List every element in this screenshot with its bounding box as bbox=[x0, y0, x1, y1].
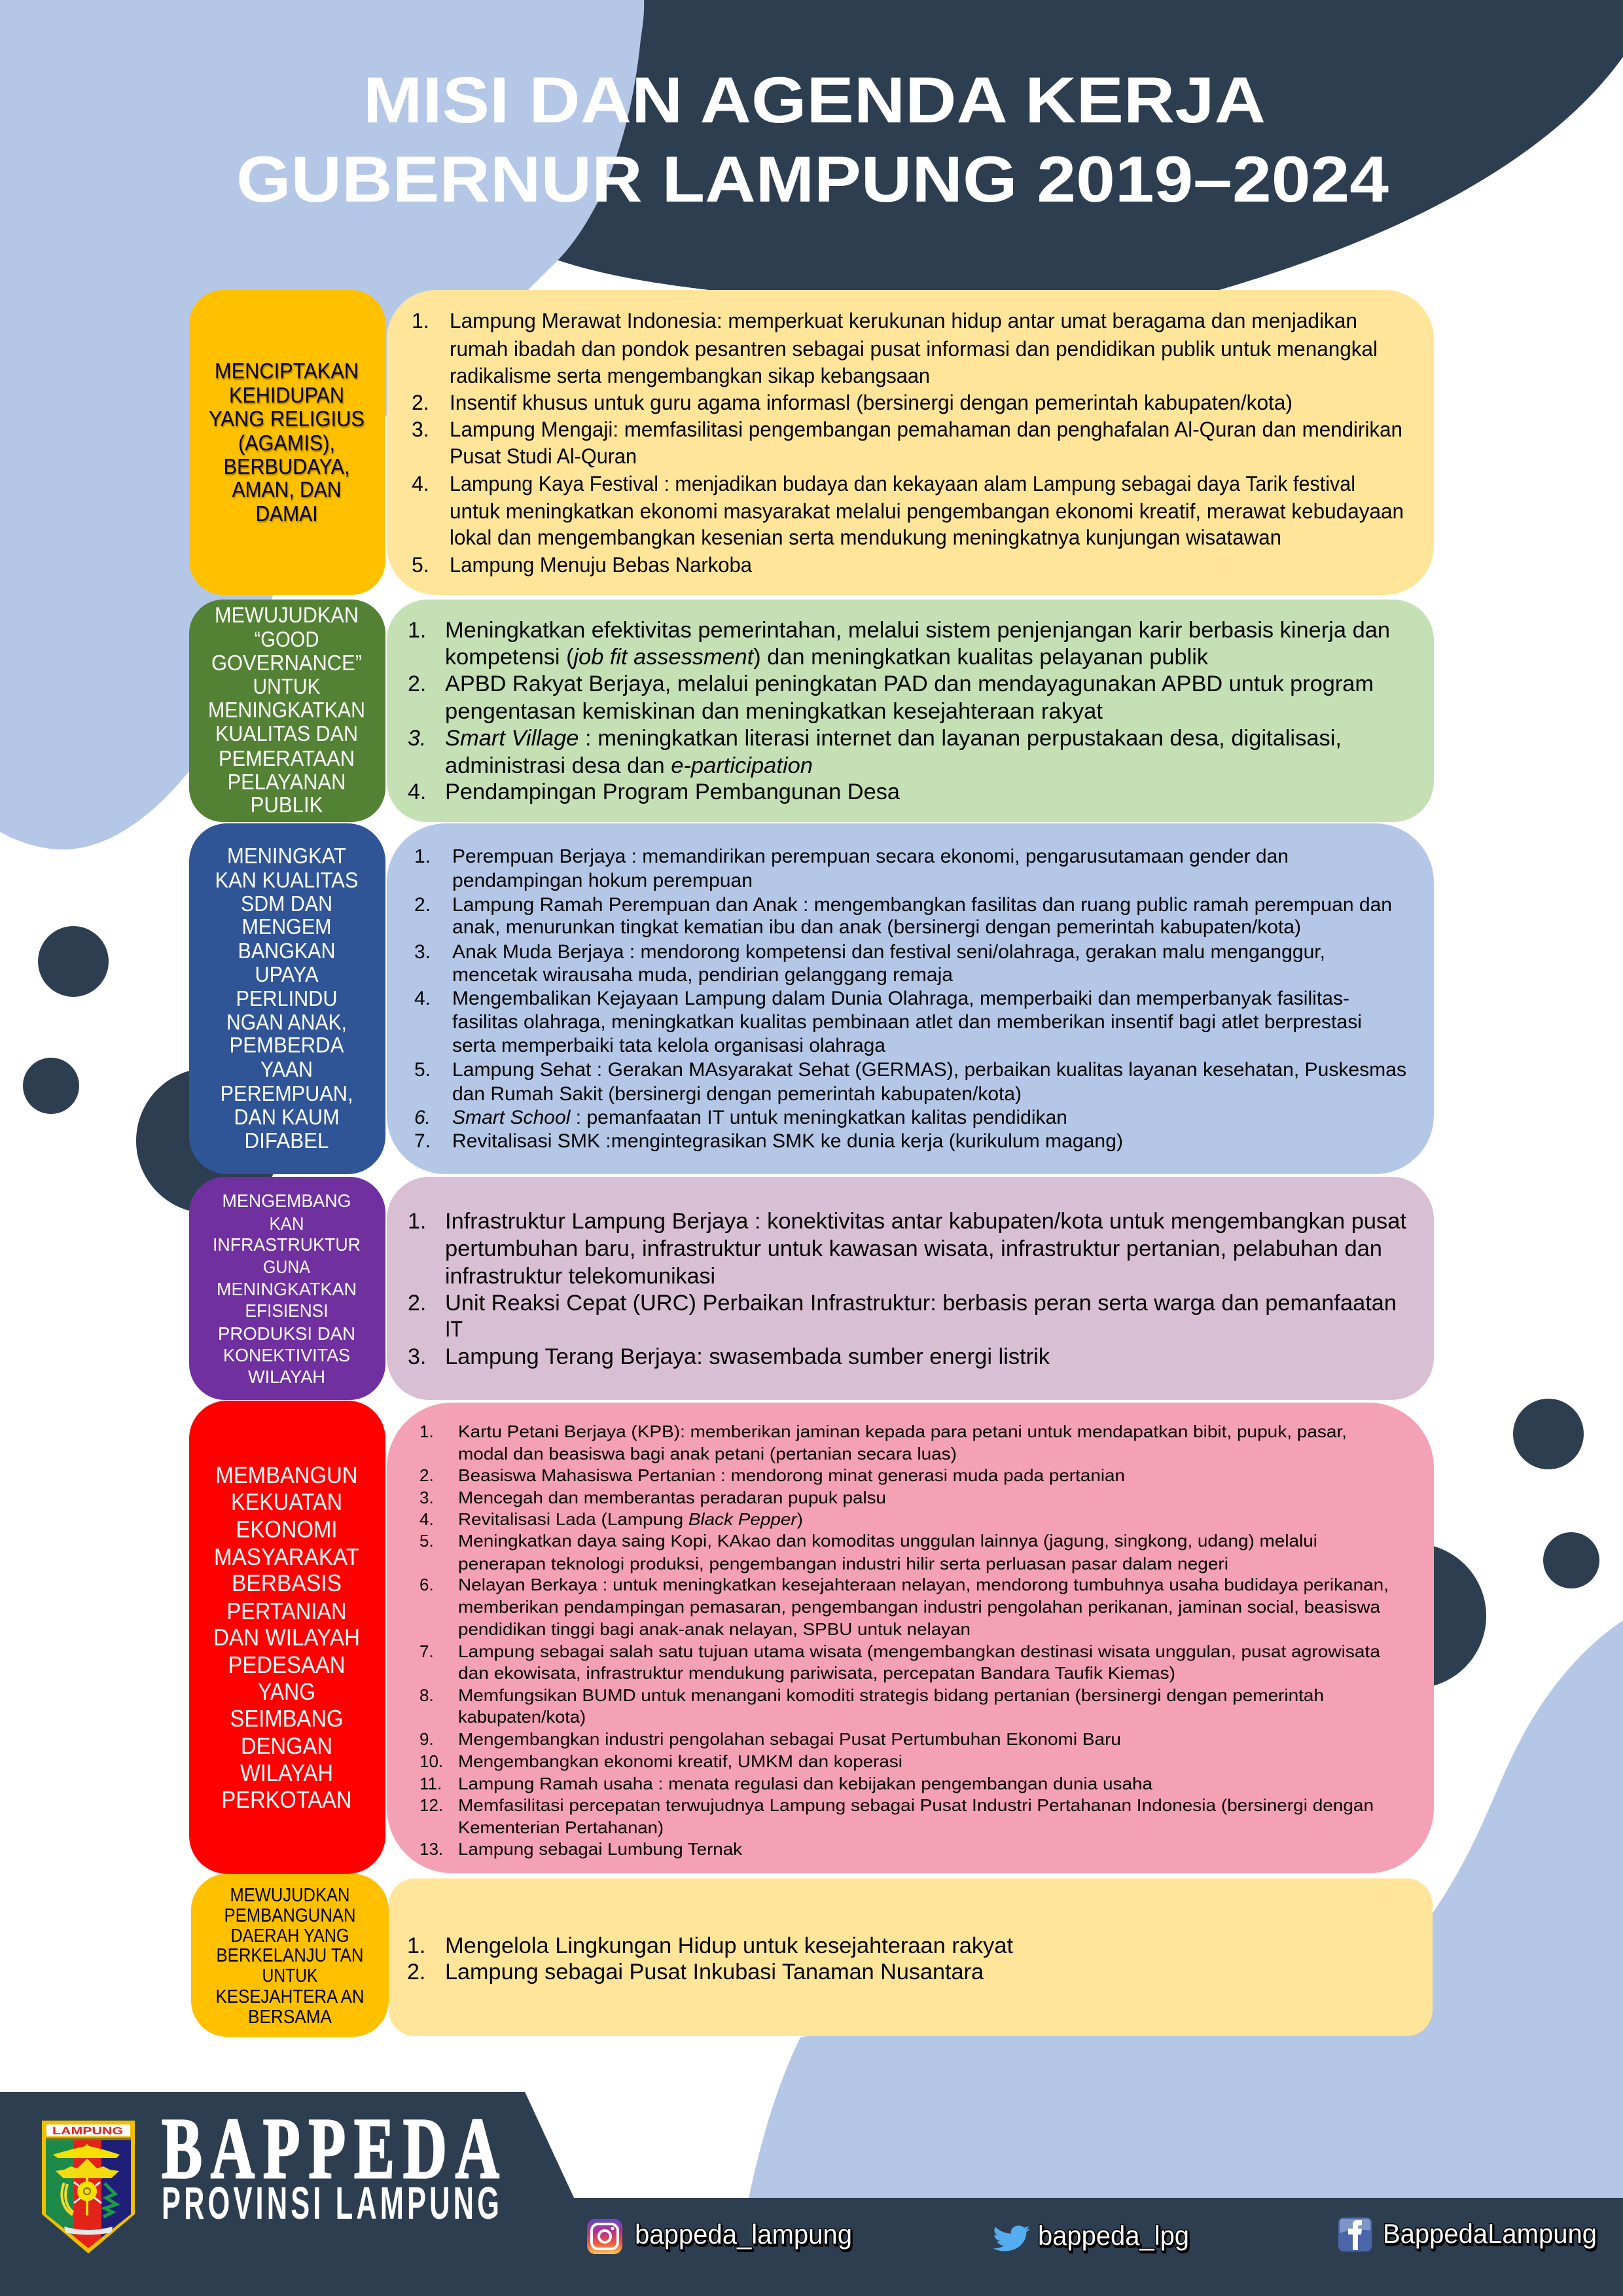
mission 2 agenda list: Pendampingan Program Pembangunan Desa bbox=[445, 780, 900, 804]
mission 3 agenda list: serta memperbaiki tata kelola organisasi olahraga bbox=[452, 1035, 885, 1056]
mission 2 label: UNTUK bbox=[253, 674, 321, 698]
mission 3 agenda list: 6. bbox=[414, 1107, 431, 1128]
mission 3 agenda list: Perempuan Berjaya : memandirikan perempuan secara ekonomi, pengarusutamaan gender dan bbox=[452, 846, 1289, 867]
mission 5 agenda list: Memfasilitasi percepatan terwujudnya Lampung sebagai Pusat Industri Pertahanan Indonesia (bersinergi dengan bbox=[458, 1795, 1374, 1815]
mission 3 agenda list: anak, menurunkan tingkat kematian ibu dan anak (bersinergi dengan pemerintah kabupaten/kota) bbox=[452, 916, 1301, 938]
mission 6 agenda list: 2. bbox=[407, 1960, 425, 1984]
mission 3 label: MENINGKAT bbox=[227, 844, 346, 868]
mission 1 agenda list: 4. bbox=[412, 472, 429, 495]
mission 2 label: PELAYANAN bbox=[228, 770, 346, 794]
mission 6 agenda list: 1. bbox=[407, 1933, 425, 1958]
mission 3 agenda list: Mengembalikan Kejayaan Lampung dalam Dunia Olahraga, memperbaiki dan memperbanyak fasilitas- bbox=[452, 988, 1349, 1009]
mission 3 label: DIFABEL bbox=[245, 1128, 329, 1153]
mission 4 agenda list: Infrastruktur Lampung Berjaya : konektivitas antar kabupaten/kota untuk mengembangkan pusat bbox=[445, 1209, 1407, 1234]
mission 1 agenda list: untuk meningkatkan ekonomi masyarakat melalui pengembangan ekonomi kreatif, merawat kebudayaan bbox=[450, 499, 1404, 523]
mission 3 agenda list: 5. bbox=[414, 1059, 431, 1081]
decorative circles right bbox=[1341, 1399, 1599, 1689]
mission 4 agenda list: Lampung Terang Berjaya: swasembada sumber energi listrik bbox=[445, 1344, 1050, 1369]
panel: mission 4 infrastructure bbox=[189, 1177, 1434, 1400]
mission 5 agenda list: 5. bbox=[419, 1531, 434, 1551]
mission 5 agenda list: 8. bbox=[419, 1685, 434, 1705]
mission 5 label: KEKUATAN bbox=[231, 1488, 342, 1515]
mission 3 label: UPAYA bbox=[255, 962, 318, 986]
mission 6 label: UNTUK bbox=[262, 1965, 318, 1986]
mission 5 label: MEMBANGUN bbox=[216, 1462, 357, 1488]
mission 5 label: PEDESAAN bbox=[228, 1651, 346, 1678]
mission 4 label: MENGEMBANG bbox=[223, 1191, 351, 1211]
mission 6 label: BERSAMA bbox=[248, 2007, 332, 2028]
mission 1 agenda list: Insentif khusus untuk guru agama informasl (bersinergi dengan pemerintah kabupaten/kota) bbox=[450, 391, 1293, 414]
mission 2 agenda list: 4. bbox=[408, 780, 426, 804]
mission 5 agenda list: Kartu Petani Berjaya (KPB): memberikan jaminan kepada para petani untuk mendapatkan bibit, pupuk, pasar, bbox=[458, 1422, 1347, 1441]
mission 5 agenda list: 4. bbox=[419, 1509, 434, 1529]
mission 5 agenda list: Nelayan Berkaya : untuk meningkatkan kesejahteraan nelayan, mendorong tumbuhnya usaha budidaya perikanan, bbox=[458, 1575, 1389, 1594]
mission 5 agenda list: pendidikan tinggi bagi anak-anak nelayan, SPBU untuk nelayan bbox=[458, 1619, 971, 1639]
mission 5 agenda list: Lampung sebagai salah satu tujuan utama wisata (mengembangkan destinasi wisata unggulan, pusat agrowisata bbox=[458, 1641, 1381, 1661]
panel: mission 3 human resources bbox=[189, 823, 1434, 1174]
mission 5 label: YANG bbox=[258, 1678, 315, 1705]
panel: mission 2 good governance bbox=[189, 600, 1434, 822]
mission 3 agenda list: dan Rumah Sakit (bersinergi dengan pemerintah kabupaten/kota) bbox=[452, 1083, 1022, 1105]
mission 4 agenda list: 3. bbox=[408, 1344, 426, 1369]
mission 3 label: KAN KUALITAS bbox=[215, 868, 359, 892]
mission 5 agenda list: 6. bbox=[419, 1575, 434, 1594]
mission 2 label bbox=[189, 600, 385, 822]
panel: mission 1 religious life bbox=[189, 290, 1434, 595]
mission 3 agenda list: 4. bbox=[414, 988, 431, 1009]
mission 1 agenda list: Lampung Merawat Indonesia: memperkuat kerukunan hidup antar umat beragama dan menjadikan bbox=[450, 309, 1357, 332]
mission 5 agenda list: Meningkatkan daya saing Kopi, KAkao dan komoditas unggulan lainnya (jagung, singkong, udang) melalui bbox=[458, 1531, 1317, 1551]
mission 3 agenda list: Anak Muda Berjaya : mendorong kompetensi dan festival seni/olahraga, gerakan malu menganggur, bbox=[452, 941, 1325, 963]
title bbox=[236, 63, 1389, 215]
mission 4 agenda list: IT bbox=[445, 1317, 463, 1342]
mission 5 label: EKONOMI bbox=[236, 1516, 338, 1543]
mission 1 agenda list: 1. bbox=[412, 309, 429, 332]
mission 4 agenda list bbox=[387, 1177, 1434, 1400]
twitter handle: bappeda_lpg bbox=[1038, 2220, 1189, 2251]
mission 5 label: BERBASIS bbox=[232, 1570, 342, 1596]
mission 5 agenda list: Beasiswa Mahasiswa Pertanian : mendorong minat generasi muda pada pertanian bbox=[458, 1465, 1125, 1485]
mission 2 agenda list: administrasi desa dan e-participation bbox=[445, 753, 813, 778]
logo: Lampung provincial shield bbox=[42, 2121, 135, 2253]
mission 5 agenda list: 12. bbox=[419, 1795, 443, 1815]
mission 3 label: SDM DAN bbox=[241, 891, 332, 916]
mission 3 agenda list: Smart School : pemanfaatan IT untuk meningkatkan kalitas pendidikan bbox=[452, 1107, 1067, 1128]
mission 4 agenda list: Unit Reaksi Cepat (URC) Perbaikan Infrastruktur: berbasis peran serta warga dan pemanfaatan bbox=[445, 1291, 1397, 1316]
mission 1 agenda list: 5. bbox=[412, 553, 429, 577]
mission 6 label: PEMBANGUNAN bbox=[224, 1905, 356, 1926]
mission 2 agenda list: 2. bbox=[408, 672, 426, 696]
mission 5 label: DAN WILAYAH bbox=[213, 1624, 360, 1651]
mission 3 agenda list: Lampung Sehat : Gerakan MAsyarakat Sehat (GERMAS), perbaikan kualitas layanan kesehatan, Puskesmas bbox=[452, 1059, 1406, 1081]
mission 6 label: KESEJAHTERA AN bbox=[216, 1986, 364, 2007]
mission 3 label bbox=[189, 823, 385, 1174]
mission 6 label: BERKELANJU TAN bbox=[216, 1945, 364, 1966]
title: GUBERNUR LAMPUNG 2019–2024 bbox=[236, 143, 1389, 215]
mission 5 agenda list: 1. bbox=[419, 1422, 434, 1441]
background: dark blob top right bbox=[553, 0, 1623, 291]
panel: mission 6 sustainable development bbox=[191, 1874, 1433, 2037]
footer band bbox=[0, 2092, 1623, 2296]
mission 6 label: DAERAH YANG bbox=[230, 1926, 349, 1946]
mission 3 agenda list: Lampung Ramah Perempuan dan Anak : mengembangkan fasilitas dan ruang public ramah perempuan dan bbox=[452, 894, 1392, 916]
mission 5 agenda list: Mencegah dan memberantas peradaran pupuk palsu bbox=[458, 1488, 886, 1507]
mission 2 agenda list bbox=[387, 600, 1434, 822]
mission 2 label: KUALITAS DAN bbox=[215, 721, 358, 745]
mission 3 agenda list: fasilitas olahraga, meningkatkan kualitas pembinaan atlet dan memberikan insentif bagi atlet berprestasi bbox=[452, 1011, 1362, 1033]
mission 3 agenda list: pendampingan hokum perempuan bbox=[452, 870, 753, 891]
mission 5 agenda list: 10. bbox=[419, 1751, 443, 1771]
mission 5 agenda list: Kementerian Pertahanan) bbox=[458, 1818, 664, 1837]
mission 4 label: PRODUKSI DAN bbox=[218, 1323, 355, 1344]
mission 2 agenda list: Smart Village : meningkatkan literasi internet dan layanan perpustakaan desa, digitalisasi, bbox=[445, 726, 1342, 751]
mission 5 agenda list: Revitalisasi Lada (Lampung Black Pepper ) bbox=[458, 1509, 803, 1529]
mission 3 label: DAN KAUM bbox=[234, 1105, 339, 1129]
mission 5 label: SEIMBANG bbox=[230, 1705, 343, 1732]
mission 6 agenda list: Mengelola Lingkungan Hidup untuk kesejahteraan rakyat bbox=[445, 1933, 1014, 1958]
mission 1 label: KEHIDUPAN bbox=[229, 383, 344, 407]
mission 4 agenda list: 1. bbox=[408, 1209, 426, 1234]
mission 1 label: MENCIPTAKAN bbox=[215, 359, 359, 383]
mission 5 agenda list: 2. bbox=[419, 1465, 434, 1485]
instagram handle: bappeda_lampung bbox=[635, 2219, 852, 2250]
mission 2 agenda list: Meningkatkan efektivitas pemerintahan, melalui sistem penjenjangan karir berbasis kinerja dan bbox=[445, 618, 1390, 643]
mission 5 agenda list: kabupaten/kota) bbox=[458, 1707, 586, 1727]
mission 5 agenda list: 13. bbox=[419, 1839, 443, 1859]
mission 4 label: GUNA bbox=[263, 1257, 310, 1277]
mission 5 agenda list: Lampung sebagai Lumbung Ternak bbox=[458, 1839, 743, 1859]
mission 2 agenda list: kompetensi (job fit assessment) dan meningkatkan kualitas pelayanan publik bbox=[445, 645, 1209, 670]
background: light blue blob bottom right bbox=[749, 1621, 1623, 2198]
mission 4 label: INFRASTRUKTUR bbox=[213, 1234, 361, 1255]
mission 3 agenda list bbox=[387, 823, 1434, 1174]
mission 3 label: YAAN bbox=[260, 1057, 313, 1081]
mission 5 label bbox=[189, 1401, 385, 1874]
mission 3 agenda list: Revitalisasi SMK :mengintegrasikan SMK ke dunia kerja (kurikulum magang) bbox=[452, 1130, 1123, 1152]
mission 3 label: MENGEM bbox=[242, 914, 331, 939]
mission 1 agenda list: Pusat Studi Al-Quran bbox=[450, 444, 637, 468]
mission 2 label: MENINGKATKAN bbox=[208, 698, 365, 722]
facebook handle: BappedaLampung bbox=[1383, 2218, 1597, 2249]
mission 1 agenda list: 3. bbox=[412, 418, 429, 441]
mission 2 agenda list: pengentasan kemiskinan dan meningkatkan kesejahteraan rakyat bbox=[445, 699, 1103, 724]
mission 3 agenda list: 7. bbox=[414, 1130, 431, 1152]
mission 2 label: PUBLIK bbox=[250, 793, 323, 817]
mission 4 label: KAN bbox=[270, 1213, 304, 1234]
wordmark: PROVINSI LAMPUNG: PROVINSI LAMPUNG bbox=[162, 2178, 499, 2229]
mission 3 label: NGAN ANAK, bbox=[226, 1010, 347, 1034]
mission 4 label: WILAYAH bbox=[248, 1367, 325, 1387]
mission 6 agenda list bbox=[389, 1878, 1433, 2036]
mission 1 agenda list: rumah ibadah dan pondok pesantren sebagai pusat informasi dan pendidikan publik untuk menangkal bbox=[450, 337, 1378, 361]
mission 3 agenda list: 1. bbox=[414, 846, 431, 867]
mission 2 label: “GOOD bbox=[254, 627, 319, 651]
mission 5 label: DENGAN bbox=[241, 1732, 332, 1759]
mission 6 label: MEWUJUDKAN bbox=[230, 1885, 349, 1906]
wordmark: BAPPEDA: BAPPEDA bbox=[162, 2100, 499, 2197]
mission 1 label: BERBUDAYA, bbox=[224, 454, 349, 478]
mission 1 agenda list: lokal dan mengembangkan kesenian serta mendukung meningkatnya kunjungan wisatawan bbox=[450, 526, 1281, 549]
mission 1 label: YANG RELIGIUS bbox=[209, 406, 365, 431]
background: light blue blob top left bbox=[0, 0, 644, 850]
mission 5 agenda list: 9. bbox=[419, 1729, 434, 1749]
logo: Lampung provincial shield: LAMPUNG bbox=[52, 2126, 123, 2137]
mission 3 label: PERLINDU bbox=[236, 986, 338, 1011]
mission 1 label: AMAN, DAN bbox=[232, 477, 342, 501]
mission 1 agenda list: Lampung Menuju Bebas Narkoba bbox=[450, 553, 752, 577]
mission 4 label: EFISIENSI bbox=[245, 1300, 329, 1321]
mission 1 agenda list bbox=[387, 290, 1434, 595]
mission 5 agenda list: modal dan beasiswa bagi anak petani (pertanian secara luas) bbox=[458, 1444, 957, 1463]
mission 5 agenda list: penerapan teknologi produksi, pengembangan industri hilir serta perluasan pasar dalam negeri bbox=[458, 1554, 1228, 1573]
mission 2 label: GOVERNANCE” bbox=[211, 651, 362, 675]
mission 2 agenda list: APBD Rakyat Berjaya, melalui peningkatan PAD dan mendayagunakan APBD untuk program bbox=[445, 672, 1374, 696]
mission 1 label bbox=[189, 290, 385, 595]
mission 1 label: (AGAMIS), bbox=[238, 431, 335, 455]
mission 1 label: DAMAI bbox=[255, 501, 318, 526]
mission 3 agenda list: 2. bbox=[414, 894, 431, 916]
mission 3 label: PEMBERDA bbox=[229, 1033, 344, 1057]
mission 3 agenda list: 3. bbox=[414, 941, 431, 963]
icon: twitter bird bbox=[993, 2225, 1030, 2251]
mission 5 agenda list: 7. bbox=[419, 1641, 434, 1661]
mission 4 agenda list: infrastruktur telekomunikasi bbox=[445, 1264, 715, 1289]
mission 3 label: BANGKAN bbox=[238, 939, 335, 963]
mission 5 agenda list: Mengembangkan industri pengolahan sebagai Pusat Pertumbuhan Ekonomi Baru bbox=[458, 1729, 1121, 1749]
mission 4 label: KONEKTIVITAS bbox=[223, 1345, 350, 1365]
mission 4 label bbox=[189, 1177, 385, 1400]
mission 5 agenda list: dan ekowisata, infrastruktur mendukung pariwisata, percepatan Bandara Taufik Kiemas) bbox=[458, 1663, 1175, 1683]
mission 2 agenda list: 1. bbox=[408, 618, 426, 643]
mission 5 agenda list: memberikan pendampingan pemasaran, pengembangan industri pengolahan perikanan, jaminan social, beasiswa bbox=[458, 1597, 1381, 1617]
mission 5 agenda list: Memfungsikan BUMD untuk menangani komoditi strategis bidang pertanian (bersinergi dengan pemerintah bbox=[458, 1685, 1324, 1705]
mission 5 agenda list: Lampung Ramah usaha : menata regulasi dan kebijakan pengembangan dunia usaha bbox=[458, 1774, 1153, 1793]
mission 2 label: PEMERATAAN bbox=[219, 746, 355, 770]
mission 2 label: MEWUJUDKAN bbox=[215, 603, 359, 627]
panel: mission 5 agricultural economy bbox=[189, 1401, 1434, 1874]
icon: facebook bbox=[1338, 2217, 1372, 2251]
mission 1 agenda list: Lampung Kaya Festival : menjadikan budaya dan kekayaan alam Lampung sebagai daya Tarik festival bbox=[450, 472, 1355, 495]
mission 6 agenda list: Lampung sebagai Pusat Inkubasi Tanaman Nusantara bbox=[445, 1960, 984, 1984]
mission 5 agenda list bbox=[387, 1403, 1434, 1873]
mission 5 agenda list: 11. bbox=[419, 1774, 442, 1793]
mission 1 agenda list: Lampung Mengaji: memfasilitasi pengembangan pemahaman dan penghafalan Al-Quran dan mendirikan bbox=[450, 418, 1402, 441]
title: MISI DAN AGENDA KERJA bbox=[363, 63, 1266, 136]
mission 5 label: PERTANIAN bbox=[226, 1598, 347, 1624]
icon: instagram bbox=[587, 2219, 622, 2254]
mission 5 label: WILAYAH bbox=[240, 1759, 333, 1786]
mission 3 label: PEREMPUAN, bbox=[220, 1081, 353, 1105]
mission 4 agenda list: 2. bbox=[408, 1291, 426, 1316]
mission 5 agenda list: Mengembangkan ekonomi kreatif, UMKM dan koperasi bbox=[458, 1751, 902, 1771]
mission 4 label: MENINGKATKAN bbox=[217, 1279, 357, 1299]
mission 2 agenda list: 3. bbox=[408, 726, 426, 751]
mission 5 label: PERKOTAAN bbox=[221, 1786, 352, 1813]
mission 1 agenda list: radikalisme serta mengembangkan sikap kebangsaan bbox=[450, 364, 930, 387]
mission 5 agenda list: 3. bbox=[419, 1488, 434, 1507]
mission 4 agenda list: pertumbuhan baru, infrastruktur untuk kawasan wisata, infrastruktur pertanian, pelabuhan dan bbox=[445, 1236, 1382, 1261]
mission 1 agenda list: 2. bbox=[412, 391, 429, 414]
decorative circles left bbox=[23, 926, 281, 1213]
mission 3 agenda list: mencetak wirausaha muda, pendirian gelanggang remaja bbox=[452, 964, 953, 986]
mission 6 label bbox=[191, 1874, 389, 2037]
mission 5 label: MASYARAKAT bbox=[214, 1543, 359, 1570]
